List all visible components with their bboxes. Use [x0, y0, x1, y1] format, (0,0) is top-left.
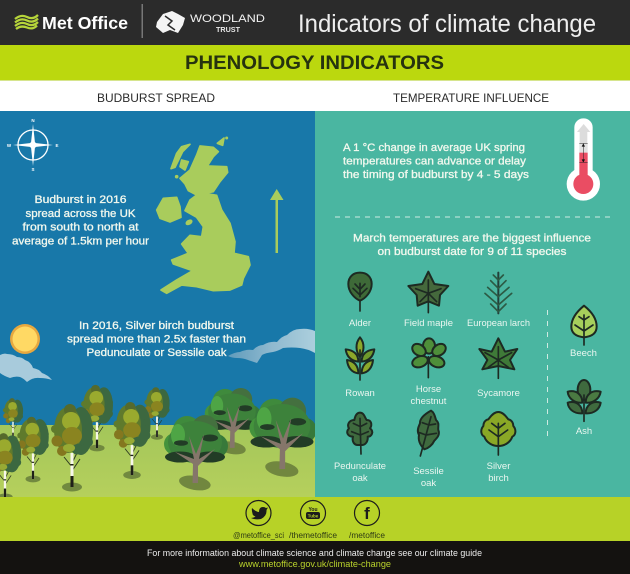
icon: compass: N [31, 118, 35, 123]
oak trees [164, 388, 317, 493]
panel: temperature influence [315, 111, 630, 498]
leaf: rowan [346, 337, 374, 380]
leaf labels: oak [421, 478, 436, 489]
text: 1 degree change: the timing of budburst by 4 - 5 days [343, 169, 530, 181]
text: silver birch comparison: Pedunculate or Sessile oak [86, 347, 227, 359]
leaf labels: Rowan [345, 388, 375, 399]
text: budburst in 2016: average of 1.5km per hour [12, 236, 149, 248]
social handles [233, 531, 386, 540]
text: silver birch comparison [67, 320, 246, 359]
text: 1 degree change: temperatures can advance or delay [343, 156, 527, 168]
footer: www.metoffice.gov.uk/climate-change [238, 559, 391, 570]
text: March temperatures [353, 232, 591, 258]
header bar [0, 0, 630, 45]
leaf: european larch [485, 273, 512, 313]
birch trees [0, 385, 170, 500]
text: March temperatures: on budburst date for 9 of 11 species [378, 246, 567, 258]
vertical dashed divider [546, 310, 548, 442]
text: budburst in 2016: from south to north at [22, 222, 138, 234]
cloud left [0, 354, 52, 382]
column headings: TEMPERATURE INFLUENCE [393, 91, 549, 105]
text: 1 degree change: A 1 °C change in average UK spring [343, 142, 525, 154]
arrow: south to north [270, 189, 284, 253]
text: 1 degree change [343, 142, 530, 181]
text: budburst in 2016 [12, 194, 149, 248]
icon: compass: E [55, 143, 59, 148]
icon: thermometer [567, 118, 600, 201]
icon: compass [7, 118, 59, 172]
leaf labels [334, 318, 597, 489]
leaf labels: Ash [576, 426, 592, 437]
column headings [97, 91, 549, 105]
icon: facebook: f [364, 504, 370, 523]
leaf labels: Pedunculate [334, 461, 386, 472]
icon: youtube: You [308, 507, 318, 513]
icon: sun [10, 324, 40, 354]
text: budburst in 2016: Budburst in 2016 [34, 194, 126, 206]
text: silver birch comparison: spread more than 2.5x faster than [67, 334, 246, 346]
heading band: phenology indicators: PHENOLOGY INDICATORS [185, 53, 444, 74]
leaf labels: European larch [467, 318, 530, 329]
leaf: sessile oak [418, 411, 439, 456]
text: silver birch comparison: In 2016, Silver birch budburst [79, 320, 234, 332]
leaf labels: Silver [487, 461, 510, 472]
panel: budburst spread [0, 111, 317, 500]
icon: twitter [246, 500, 271, 526]
leaves [346, 272, 601, 456]
leaf labels: Sycamore [477, 388, 520, 399]
leaf labels: chestnut [411, 396, 447, 407]
icon: youtube: Tube [308, 514, 319, 518]
Met Office logo: Met Office [42, 13, 128, 33]
dashed divider [335, 216, 610, 218]
text: budburst in 2016: spread across the UK [26, 208, 136, 220]
leaf labels: Alder [349, 318, 371, 329]
heading band: phenology indicators [0, 45, 630, 81]
leaf labels: Beech [570, 348, 597, 359]
leaf: sycamore [479, 338, 517, 378]
icon: facebook [354, 500, 380, 526]
social handles: /metoffice [349, 531, 386, 540]
leaf labels: Horse [416, 384, 441, 395]
social handles: /themetoffice [289, 531, 338, 540]
Woodland Trust logo [142, 4, 265, 38]
leaf labels: Sessile [413, 466, 444, 477]
Woodland Trust logo: TRUST [216, 27, 241, 34]
leaf: pedunculate oak [347, 413, 372, 454]
icon: youtube [300, 500, 326, 526]
leaf: ash [568, 380, 601, 421]
text: March temperatures: March temperatures are the biggest influence [353, 232, 591, 244]
social media strip [0, 497, 630, 542]
leaf: beech [571, 306, 597, 345]
map of the UK [157, 137, 250, 293]
leaf: alder [348, 273, 372, 311]
leaf labels: Field maple [404, 318, 453, 329]
Woodland Trust logo: WOODLAND [190, 13, 265, 25]
social handles: @metoffice_sci [233, 531, 284, 540]
column headings: BUDBURST SPREAD [97, 91, 215, 105]
leaf: field maple [408, 272, 448, 313]
leaf labels: oak [352, 473, 368, 484]
footer: For more information about climate science and climate change see our climate guide [147, 548, 482, 559]
cloud right [228, 329, 315, 363]
icon: compass: S [31, 167, 35, 172]
page title: Indicators of climate change [298, 10, 596, 38]
leaf: silver birch [481, 412, 515, 455]
leaf: horse chestnut [410, 338, 448, 378]
footer [0, 541, 630, 574]
icon: compass: W [7, 143, 12, 148]
ground [0, 425, 315, 498]
leaf labels: birch [488, 473, 509, 484]
